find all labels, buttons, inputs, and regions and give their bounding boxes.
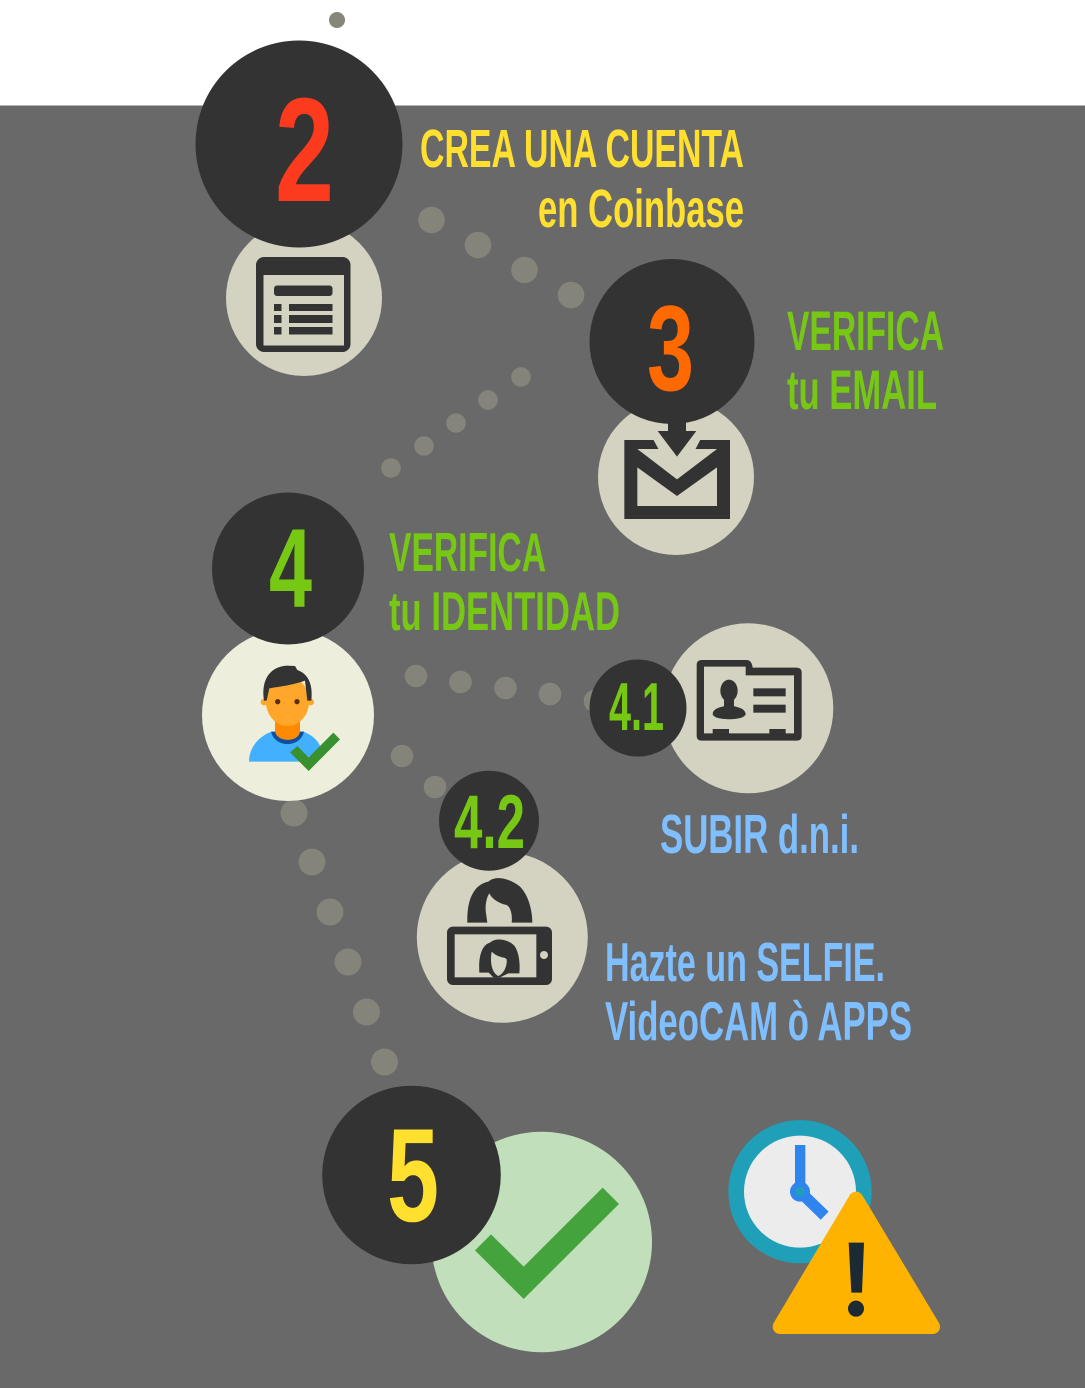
number badge 5 [322,1086,501,1264]
dot trail: step 4 to step 5 [280,800,398,1076]
icon: check mark [475,1188,619,1299]
icon: email envelope [624,417,730,519]
heading: crea una cuenta: en Coinbase [538,179,744,239]
number badge 4.2 [439,771,539,871]
dot trail: step 3 to step 4 [381,367,531,478]
heading: verifica tu email: tu EMAIL [787,358,937,421]
dot trail: step 4 to step 4.1 [405,665,606,712]
number badge 3: 3 [647,280,694,416]
icon: warning triangle [780,1199,933,1327]
number badge 3 [590,259,754,424]
heading: verifica tu email: VERIFICA [787,299,944,362]
icon: id card [697,660,802,741]
panel: step 4 icon [202,629,374,801]
heading: verifica tu identidad: tu IDENTIDAD [389,580,620,642]
label: subir dni: SUBIR d.n.i. [660,803,859,865]
icon: verified person [249,666,340,771]
panel: step 5 check [431,1132,652,1352]
number badge 4.2: 4.2 [454,780,525,865]
panel: step 4.1 icon [663,623,833,793]
heading: verifica tu identidad: VERIFICA [389,521,546,583]
number badge 4 [212,492,364,644]
icon: web form [256,257,350,352]
icon: selfie on phone [447,878,552,985]
number badge 5: 5 [387,1102,439,1250]
number badge 2: 2 [275,68,334,233]
label: hazte un selfie: VideoCAM ò APPS [605,990,912,1052]
icon: clock and warning [728,1120,933,1327]
panel: step 3 icon [598,399,754,555]
dot trail: step 4 to step 4.2 [391,745,446,798]
number badge 2 [196,40,402,248]
label: hazte un selfie [605,931,912,1052]
panel: step 4.2 icon [417,852,588,1023]
dot trail: step 2 to step 3 [418,207,584,308]
heading: verifica tu identidad [389,521,620,642]
dot trail: top dot [329,12,345,28]
heading: verifica tu email [787,299,944,421]
heading: crea una cuenta [420,119,744,239]
icon: clock [728,1120,872,1263]
label: hazte un selfie: Hazte un SELFIE. [605,931,885,993]
number badge 4.1: 4.1 [609,669,664,745]
number badge 4: 4 [269,506,312,631]
heading: crea una cuenta: CREA UNA CUENTA [420,119,744,179]
panel: step 2 icon [226,220,382,376]
number badge 4.1 [590,660,686,756]
